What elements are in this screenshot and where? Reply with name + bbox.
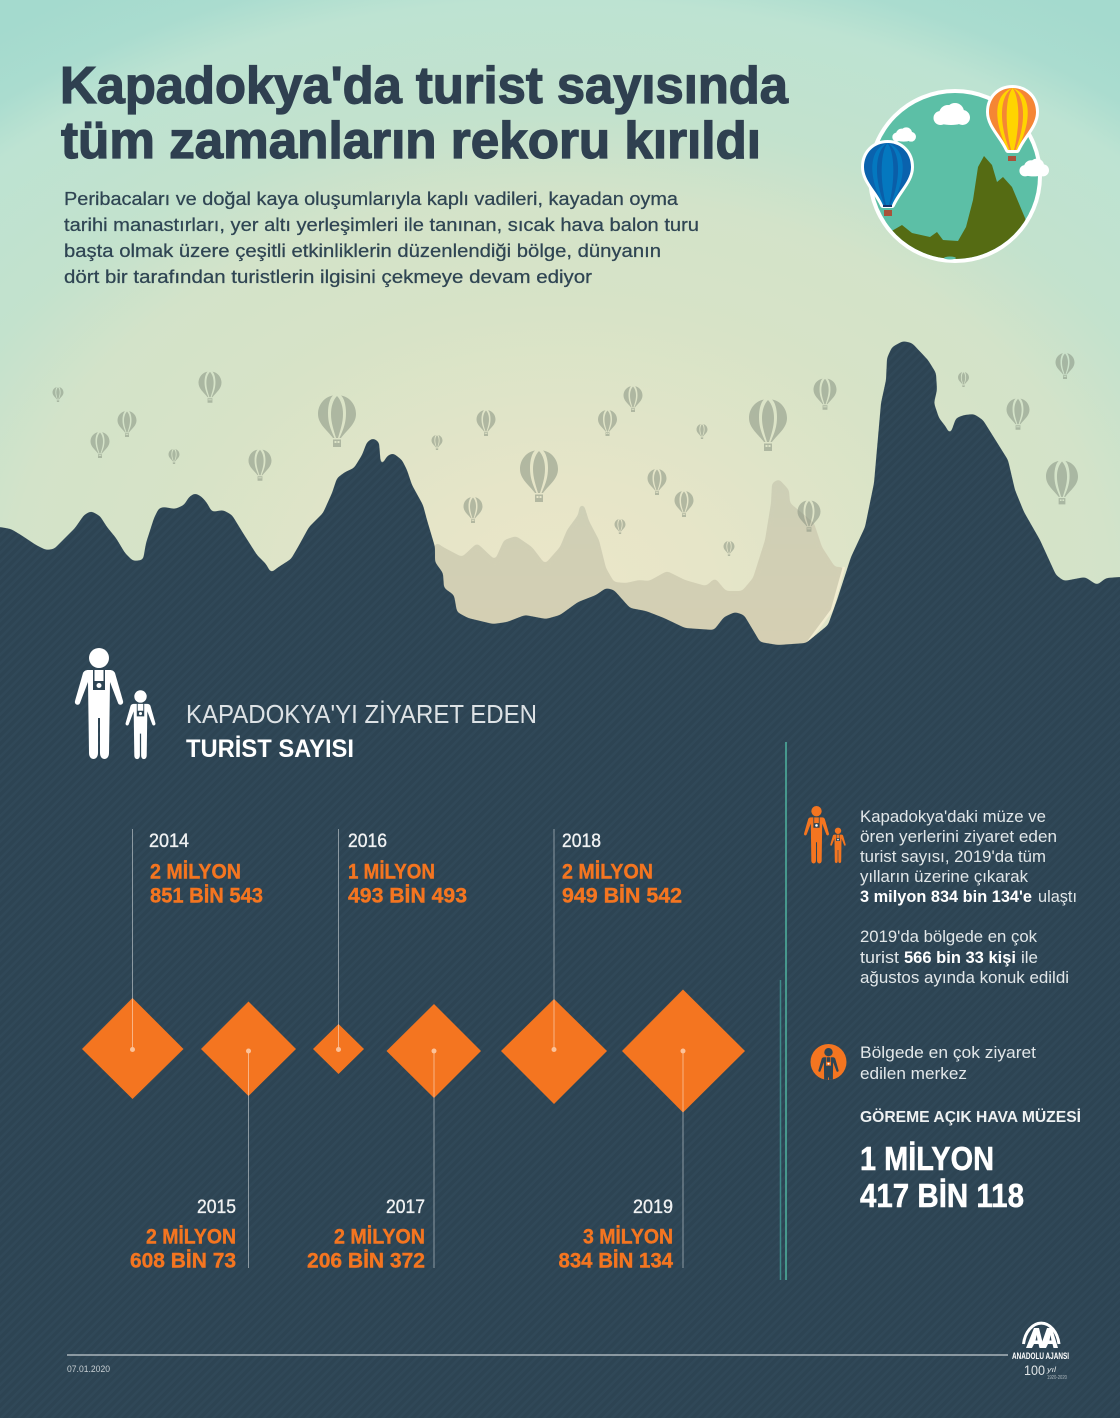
side note: August peak xyxy=(860,928,1069,987)
timeline: 2018 xyxy=(501,829,682,1104)
side note: most visited site: GÖREME AÇIK HAVA MÜZESİ xyxy=(860,1109,1081,1126)
side note: most visited site: 1 MİLYON xyxy=(860,1140,994,1177)
dark foreground mountains and lower panel xyxy=(0,330,1120,1418)
date: 07.01.2020 xyxy=(67,1364,110,1375)
timeline: 2015: 2015 xyxy=(197,1197,236,1218)
distant beige rock formations xyxy=(430,479,844,655)
side note: August peak: ağustos ayında konuk edildi xyxy=(860,969,1069,987)
timeline: 2017: 206 BİN 372 xyxy=(307,1248,425,1272)
intro paragraph: tarihi manastırları, yer altı yerleşimleri ile tanınan, sıcak hava balon turu xyxy=(64,214,699,235)
intro paragraph: başta olmak üzere çeşitli etkinliklerin düzenlendiği bölge, dünyanın xyxy=(64,240,661,261)
cream rim of the distant valley xyxy=(806,567,844,645)
background hot air balloons xyxy=(53,353,1078,556)
timeline: 2016: 493 BİN 493 xyxy=(348,884,467,908)
timeline: 2014: 851 BİN 543 xyxy=(150,884,263,908)
icon: orange tourists xyxy=(804,806,846,863)
timeline: 2014 xyxy=(82,829,263,1099)
timeline: 2018: 2018 xyxy=(562,831,601,852)
timeline: 2017: 2 MİLYON xyxy=(334,1224,425,1248)
side note: total visitors: Kapadokya'daki müze ve xyxy=(860,808,1046,826)
timeline: 2017 xyxy=(307,1004,481,1272)
timeline: 2014: 2 MİLYON xyxy=(150,860,241,884)
intro paragraph: Peribacaları ve doğal kaya oluşumlarıyla kaplı vadileri, kayadan oyma xyxy=(64,188,679,209)
timeline: 2017: 2017 xyxy=(386,1197,425,1218)
side note: most visited site: 417 BİN 118 xyxy=(860,1177,1024,1214)
timeline: 2016: 2016 xyxy=(348,831,387,852)
logo: Anadolu Ajansı: 100 xyxy=(1024,1362,1045,1378)
side note: most visited site: edilen merkez xyxy=(860,1065,967,1083)
logo: Anadolu Ajansı: ANADOLU AJANSI xyxy=(1012,1351,1069,1361)
side note: August peak: ile xyxy=(1021,949,1038,967)
section heading: KAPADOKYA'YI ZİYARET EDEN xyxy=(186,699,537,729)
logo: Anadolu Ajansı: 1920-2020 xyxy=(1047,1375,1067,1381)
timeline: 2019 xyxy=(558,990,745,1272)
side note: August peak: 2019'da bölgede en çok xyxy=(860,928,1038,946)
icon: white tourists with cameras xyxy=(75,648,155,759)
logo: Anadolu Ajansı: yıl xyxy=(1046,1367,1057,1374)
timeline: 2019: 2019 xyxy=(633,1197,673,1218)
icon: blue balloon xyxy=(864,143,911,216)
side note: most visited site: Bölgede en çok ziyaret xyxy=(860,1044,1036,1062)
intro paragraph xyxy=(64,188,699,287)
icon: orange badge with person xyxy=(810,1044,846,1080)
side note: August peak: turist xyxy=(860,949,899,967)
side note: total visitors xyxy=(860,808,1077,906)
title xyxy=(60,57,789,170)
title: tüm zamanların rekoru kırıldı xyxy=(61,112,761,170)
timeline: 2015: 608 BİN 73 xyxy=(130,1248,236,1272)
side note: total visitors: ören yerlerini ziyaret eden xyxy=(860,828,1057,846)
timeline: 2016 xyxy=(313,829,467,1074)
timeline: 2015 xyxy=(130,1002,296,1272)
timeline: 2018: 2 MİLYON xyxy=(562,860,653,884)
side note: total visitors: ulaştı xyxy=(1038,888,1077,906)
section heading xyxy=(186,699,537,763)
intro paragraph: dört bir tarafından turistlerin ilgisini çekmeye devam ediyor xyxy=(64,266,592,287)
side note: total visitors: yılların üzerine çıkarak xyxy=(860,868,1029,886)
section heading: TURİST SAYISI xyxy=(186,735,354,763)
timeline: 2019: 3 MİLYON xyxy=(583,1224,673,1248)
icon: round Cappadocia landscape with balloons xyxy=(864,88,1049,270)
icon: orange and yellow balloon xyxy=(989,88,1036,161)
side note: August peak: 566 bin 33 kişi xyxy=(904,949,1016,967)
timeline: 2014: 2014 xyxy=(149,831,189,852)
timeline: 2018: 949 BİN 542 xyxy=(562,884,682,908)
timeline: 2015: 2 MİLYON xyxy=(146,1224,236,1248)
side note: total visitors: 3 milyon 834 bin 134'e xyxy=(860,888,1032,906)
title: Kapadokya'da turist sayısında xyxy=(60,57,789,115)
timeline: 2019: 834 BİN 134 xyxy=(558,1248,673,1272)
logo: Anadolu Ajansı xyxy=(1012,1323,1069,1381)
timeline: 2016: 1 MİLYON xyxy=(348,860,435,884)
side note: total visitors: turist sayısı, 2019'da tüm xyxy=(860,848,1046,866)
side note: most visited site xyxy=(860,1044,1081,1214)
